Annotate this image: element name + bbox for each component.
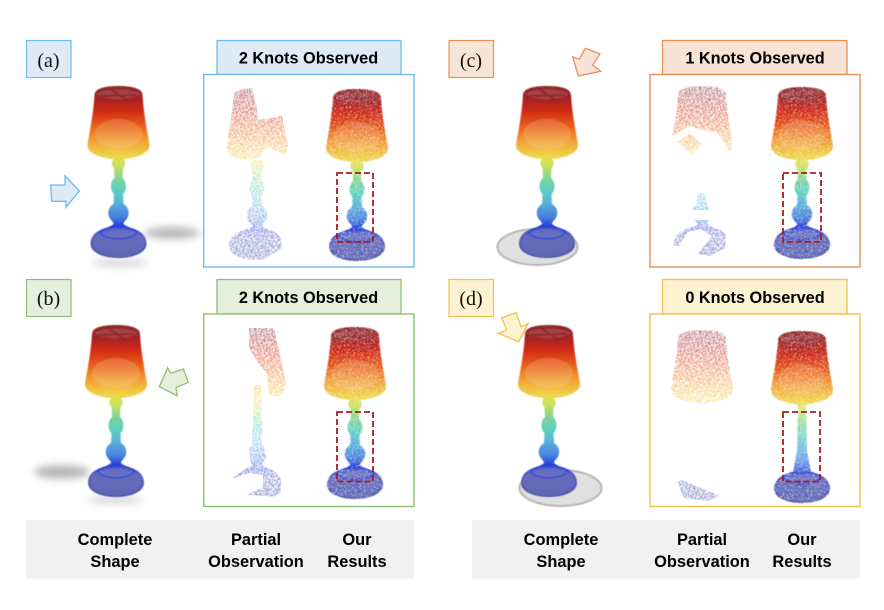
partial observation (d): [671, 330, 733, 502]
label (d): (d): [459, 288, 483, 310]
red dashed box (c): [783, 173, 821, 242]
label (b): [26, 280, 71, 316]
caption bar: left: [26, 520, 414, 578]
partial observation (a): [226, 88, 288, 260]
heading tab (c): [662, 40, 847, 74]
result box (d): [650, 314, 860, 506]
label (b): (b): [37, 288, 60, 310]
our result (c): [771, 87, 833, 259]
our result (d): [771, 331, 833, 503]
caption: our results: Our: [787, 531, 817, 549]
ground disc (d): [520, 470, 602, 506]
ground disc (c): [498, 229, 578, 265]
label (c): (c): [460, 50, 482, 72]
red dashed box (a): [337, 173, 373, 242]
label (a): [26, 40, 71, 78]
caption: our results: Our: [342, 531, 372, 549]
caption: our results: Results: [772, 553, 832, 571]
caption: partial observation: Partial: [231, 531, 281, 549]
label (d): [449, 280, 494, 316]
panel: (c) 1 knots observed: [449, 40, 860, 267]
heading tab (a): [217, 40, 401, 74]
caption: partial observation: Observation: [208, 553, 304, 571]
partial observation (b): [232, 328, 286, 496]
shadow under lamp (a): [92, 227, 200, 266]
arrow (a): [51, 176, 79, 207]
complete lamp (b): [85, 325, 147, 497]
caption: partial observation: Partial: [677, 531, 727, 549]
heading tab (b): [217, 280, 401, 314]
result box (a): [204, 74, 414, 267]
result box (b): [204, 314, 414, 506]
heading tab (d): 0 Knots Observed: [685, 289, 825, 307]
caption: complete shape: Shape: [536, 553, 586, 571]
heading tab (a): 2 Knots Observed: [239, 50, 378, 68]
arrow (d): [498, 313, 528, 342]
caption: complete shape: Complete: [78, 531, 152, 549]
complete lamp (a): [87, 86, 150, 258]
arrow (c): [573, 48, 601, 76]
our result (a): [326, 89, 388, 261]
panel: (d) 0 knots observed: [449, 280, 860, 506]
label (a): (a): [37, 50, 60, 72]
caption bar: right: [472, 520, 860, 578]
result box (c): [650, 74, 860, 267]
complete lamp (c): [516, 86, 578, 258]
heading tab (c): 1 Knots Observed: [685, 50, 825, 68]
complete lamp (d): [518, 325, 580, 497]
caption: complete shape: Shape: [90, 553, 140, 571]
red dashed box (d): [783, 412, 820, 482]
heading tab (b): 2 Knots Observed: [239, 289, 378, 307]
caption: our results: Results: [327, 553, 387, 571]
arrow (b): [159, 368, 188, 396]
shadow under lamp (b): [34, 465, 143, 503]
partial observation (c): [671, 86, 733, 258]
heading tab (d): [662, 280, 847, 314]
red dashed box (b): [337, 412, 373, 482]
caption: complete shape: Complete: [524, 531, 598, 549]
panel: (a) 2 knots observed: [26, 40, 414, 267]
panel: (b) 2 knots observed: [26, 280, 414, 506]
our result (b): [324, 327, 386, 499]
caption: partial observation: Observation: [654, 553, 750, 571]
label (c): [449, 40, 494, 78]
